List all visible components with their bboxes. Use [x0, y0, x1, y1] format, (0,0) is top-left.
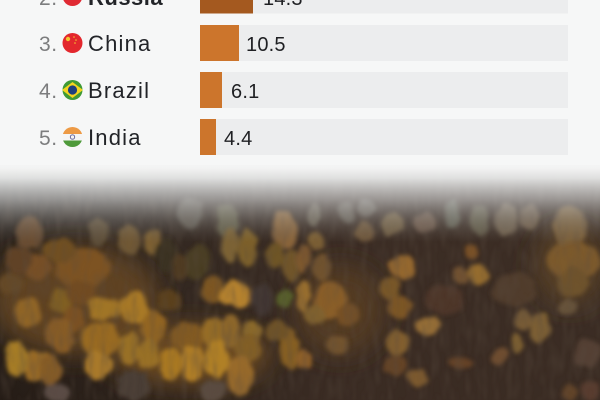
- row 5: India: [39, 119, 568, 155]
- icon: Brazil flag: [62, 80, 83, 100]
- row 3: China: 3.: [39, 33, 58, 56]
- row 5: India: 5.: [39, 127, 58, 150]
- row 3: China: [39, 25, 568, 61]
- row 4: Brazil: [39, 72, 568, 108]
- icon: India flag: [63, 127, 82, 147]
- row 5: India: 4.4: [224, 128, 252, 150]
- icon: China flag: [62, 33, 83, 53]
- bar chart: top forest countries: [39, 0, 568, 155]
- row 3: China: China: [88, 31, 151, 56]
- row 2: Russia: [39, 0, 568, 14]
- row 4: Brazil: 6.1: [231, 81, 259, 103]
- row 5: India: India: [88, 125, 142, 150]
- forest photograph: [0, 165, 600, 400]
- row 4: Brazil: 4.: [39, 80, 58, 103]
- row 4: Brazil: Brazil: [88, 78, 150, 103]
- white fade over forest: [0, 160, 600, 242]
- row 3: China: 10.5: [246, 34, 286, 56]
